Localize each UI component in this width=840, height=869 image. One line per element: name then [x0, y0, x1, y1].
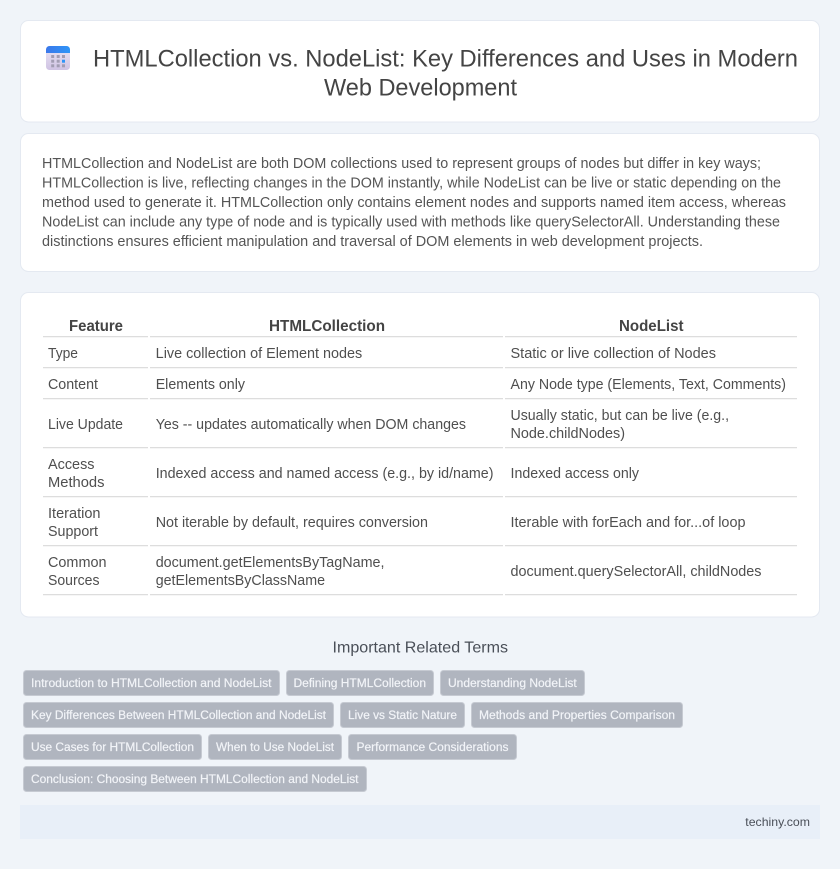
- tag: Methods and Properties Comparison: [479, 708, 675, 722]
- title: HTMLCollection vs. NodeList: Key Differences and Uses in Modern: [93, 46, 798, 72]
- table row: type: Static or live collection of Nodes: [510, 346, 716, 362]
- table row: type: [48, 346, 716, 362]
- table row: common sources: document.getElementsByTagName,: [156, 555, 384, 571]
- tag: [340, 702, 464, 728]
- panel: introduction: [20, 134, 820, 272]
- table row: access methods: Access: [48, 457, 94, 473]
- table row: type: Live collection of Element nodes: [156, 346, 362, 362]
- table row: content: Content: [48, 377, 98, 393]
- table row: type: Type: [48, 346, 78, 362]
- tag: [24, 734, 202, 760]
- heading: important related terms: Important Related Terms: [332, 640, 508, 656]
- text block: summary paragraph: HTMLCollection and NodeList are both DOM collections used to represent groups of nodes but differ in key ways;: [42, 156, 761, 172]
- tag: Defining HTMLCollection: [294, 676, 426, 690]
- table row: common sources: document.querySelectorAll, childNodes: [510, 564, 762, 580]
- tag: Understanding NodeList: [448, 676, 577, 690]
- table row: iteration support: [48, 506, 746, 540]
- table row: iteration support: Iterable with forEach and for...of loop: [510, 515, 746, 531]
- table row: common sources: Common: [48, 555, 106, 571]
- icon: calendar grid: [46, 46, 70, 70]
- tag: Introduction to HTMLCollection and NodeList: [31, 676, 272, 690]
- table row: access methods: [48, 457, 640, 491]
- table row: access methods: Indexed access and named access (e.g., by id/name): [156, 466, 493, 482]
- text block: summary paragraph: distinctions ensures efficient manipulation and traversal of DOM elements in web development projects.: [42, 234, 703, 250]
- panel: related term tags: [24, 670, 682, 792]
- tag: [24, 670, 280, 696]
- tag: [348, 734, 516, 760]
- table header row: HTMLCollection: [269, 318, 385, 335]
- table row: live update: [48, 408, 729, 442]
- table row: common sources: [48, 555, 762, 589]
- table row: content: Any Node type (Elements, Text, Comments): [510, 377, 786, 393]
- tag: Performance Considerations: [356, 740, 508, 754]
- tag: [24, 702, 334, 728]
- text block: summary paragraph: HTMLCollection is live, reflecting changes in the DOM instantly, while NodeList can be live or static depending on the: [42, 176, 781, 192]
- table row: content: [48, 377, 786, 393]
- table row: iteration support: Not iterable by default, requires conversion: [156, 515, 428, 531]
- footer: [20, 805, 820, 839]
- table row: access methods: Methods: [48, 475, 104, 491]
- table row: iteration support: Support: [48, 524, 98, 540]
- table row: live update: Live Update: [48, 417, 123, 433]
- tag: [440, 670, 584, 696]
- text block: summary paragraph: method used to generate it. HTMLCollection only contains element nodes and supports named item access, whereas: [42, 195, 786, 211]
- title: [93, 46, 798, 102]
- table row: common sources: getElementsByClassName: [156, 573, 325, 589]
- table row: content: Elements only: [156, 377, 246, 393]
- tag: [286, 670, 434, 696]
- table row: common sources: Sources: [48, 573, 100, 589]
- table row: iteration support: Iteration: [48, 506, 100, 522]
- tag: [472, 702, 682, 728]
- panel: comparison table: [20, 292, 820, 617]
- tag: Conclusion: Choosing Between HTMLCollection and NodeList: [31, 772, 359, 786]
- table header row: [69, 318, 684, 335]
- tag: Use Cases for HTMLCollection: [31, 740, 194, 754]
- tag: [24, 766, 366, 792]
- table row: live update: Yes -- updates automatically when DOM changes: [156, 417, 466, 433]
- tag: Live vs Static Nature: [348, 708, 457, 722]
- table header row: Feature: [69, 318, 123, 335]
- tag: [208, 734, 342, 760]
- text block: summary paragraph: [42, 156, 786, 250]
- tag: Key Differences Between HTMLCollection and NodeList: [31, 708, 327, 722]
- panel: header: [20, 20, 820, 122]
- title: Web Development: [324, 74, 517, 102]
- tag: When to Use NodeList: [216, 740, 335, 754]
- text block: summary paragraph: NodeList can include any type of node and is typically used with methods like querySelectorAll. Understanding these: [42, 214, 780, 230]
- footer source text: techiny.com: [745, 815, 810, 829]
- table row: live update: Usually static, but can be live (e.g.,: [510, 408, 729, 424]
- table row: live update: Node.childNodes): [510, 426, 625, 442]
- table header row: NodeList: [619, 318, 684, 335]
- table row: access methods: Indexed access only: [510, 466, 640, 482]
